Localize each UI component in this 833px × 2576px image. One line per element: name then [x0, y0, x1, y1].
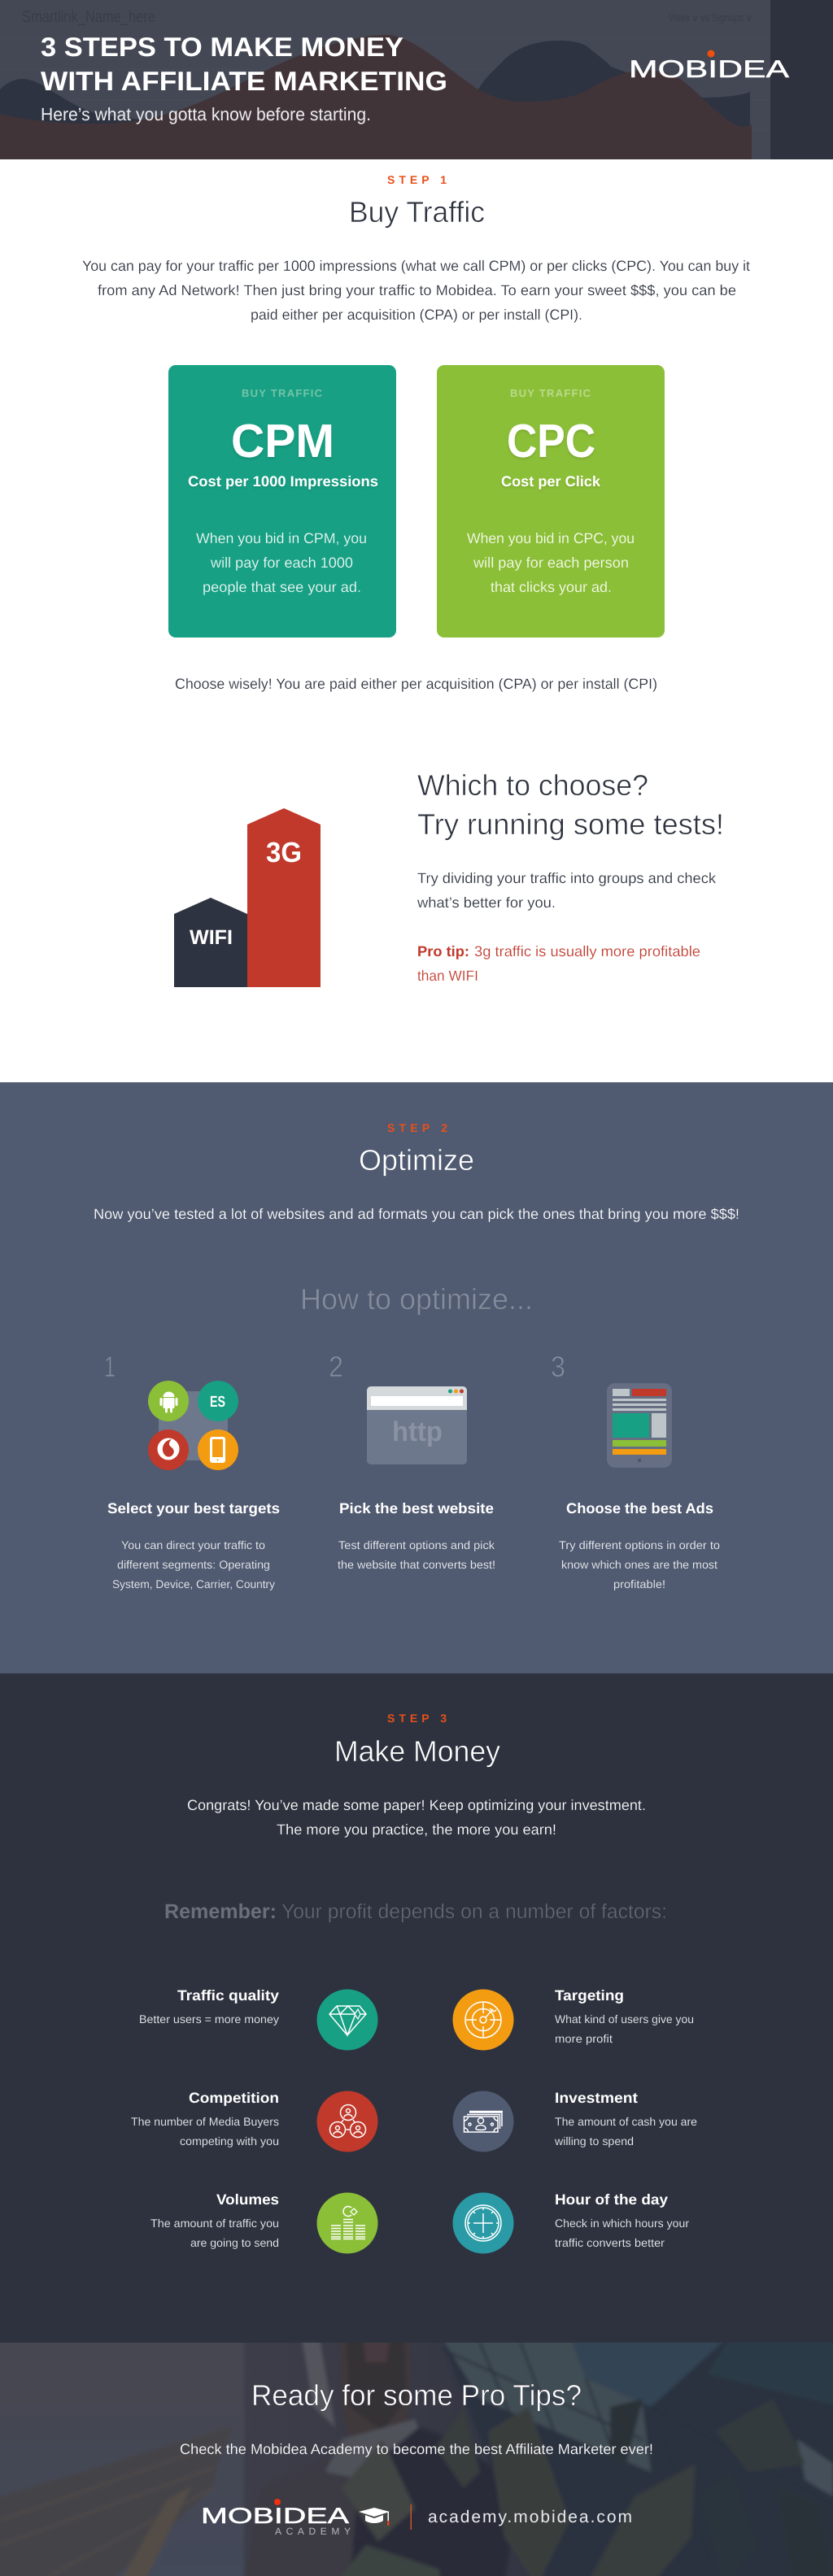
- number 3: 3: [551, 1350, 565, 1383]
- icon: target circles: [148, 1381, 238, 1470]
- background: businessman and falling money photo: [0, 2334, 833, 2576]
- text: ads: know which ones are the most: [561, 1558, 717, 1571]
- text: ads: [559, 1538, 720, 1590]
- pro tip: [417, 943, 700, 984]
- heading: optimize: Optimize: [359, 1143, 474, 1177]
- factor: competition: [131, 2090, 377, 2152]
- icon: tablet with ads: [607, 1383, 672, 1468]
- card: CPC: BUY TRAFFIC: [510, 387, 591, 399]
- heading: select targets: Select your best targets: [107, 1500, 280, 1516]
- intro text: The more you practice, the more you earn!: [277, 1821, 556, 1838]
- factor: investment: Investment: [555, 2090, 638, 2106]
- icon: people network: [317, 2091, 377, 2152]
- chart label: visits vs signups: Visits ∨ vs Signups ∨: [669, 11, 752, 24]
- subheading: remember: Your profit depends on a number of factors:: [281, 1900, 667, 1923]
- step 1 label: STEP 1: [387, 173, 447, 186]
- bar: wifi: [174, 898, 247, 987]
- panel: step 2 optimize: [0, 1082, 833, 1673]
- text: targets: different segments: Operating: [117, 1558, 270, 1571]
- factor: targeting: Targeting: [555, 1987, 624, 2004]
- card: CPC: CPC: [507, 415, 595, 468]
- text: try dividing: what’s better for you.: [416, 894, 556, 911]
- intro text: from any Ad Network! Then just bring your traffic to Mobidea. To earn your sweet $$$, you can be: [98, 282, 736, 298]
- panel: step 1 buy traffic: [0, 159, 833, 1082]
- divider line: [410, 2504, 412, 2530]
- factor: traffic quality: Better users = more money: [139, 2012, 279, 2026]
- heading: make money: Make Money: [334, 1734, 500, 1768]
- text: try dividing: Try dividing your traffic into groups and check: [417, 870, 717, 886]
- logo: Mobidea: MOBIDEA: [629, 56, 789, 83]
- factor: targeting: [452, 1987, 694, 2051]
- icon: browser window: [367, 1386, 467, 1464]
- chart label: smartlink name: Smartlink_Name_here: [22, 8, 155, 26]
- icon: banknotes: [452, 2091, 514, 2152]
- card: CPM: people that see your ad.: [203, 579, 361, 595]
- intro text: paid either per acquisition (CPA) or per install (CPI).: [251, 307, 582, 323]
- factor: volumes: are going to send: [190, 2236, 279, 2249]
- icon: coin stacks: [317, 2192, 377, 2254]
- logo: Mobidea Academy: [201, 2499, 390, 2537]
- card: CPC: Cost per Click: [501, 473, 601, 490]
- title: WITH AFFILIATE MARKETING: [41, 66, 447, 96]
- column 3: ads: [551, 1350, 720, 1590]
- text: targets: [112, 1538, 275, 1590]
- bar: wifi: WIFI: [190, 926, 233, 949]
- icon: target: [452, 1989, 514, 2051]
- factor: hour of the day: Check in which hours your: [555, 2217, 689, 2230]
- intro text: You can pay for your traffic per 1000 impressions (what we call CPM) or per clicks (CPC). You can buy it: [82, 258, 750, 274]
- text: website: the website that converts best!: [338, 1558, 495, 1571]
- factor: investment: [452, 2090, 697, 2152]
- card: CPC: that clicks your ad.: [491, 579, 612, 595]
- card: CPM: [168, 365, 396, 637]
- icon: browser window: http: [392, 1416, 443, 1447]
- link: academy url: academy.mobidea.com: [428, 2508, 632, 2526]
- step 3 label: STEP 3: [387, 1712, 447, 1725]
- heading: pick website: Pick the best website: [339, 1500, 494, 1516]
- panel: header: [0, 0, 833, 159]
- factor: investment: willing to spend: [554, 2134, 634, 2147]
- logo: Mobidea: [629, 50, 789, 83]
- number 1: 1: [104, 1350, 116, 1383]
- card: CPM: CPM: [231, 415, 334, 468]
- icon: diamond: [317, 1989, 377, 2051]
- chart: background hills: [0, 35, 752, 159]
- card: CPM: will pay for each 1000: [210, 555, 353, 571]
- logo: Mobidea Academy: MOBIDEA: [201, 2504, 349, 2528]
- bar: 3g: [247, 808, 321, 987]
- factor: investment: The amount of cash you are: [555, 2115, 697, 2128]
- text: targets: You can direct your traffic to: [121, 1538, 265, 1551]
- factor: targeting: What kind of users give you: [555, 2012, 694, 2026]
- subheading: how to optimize: How to optimize...: [300, 1282, 533, 1316]
- heading: choose ads: Choose the best Ads: [566, 1500, 713, 1516]
- column 2: website: [329, 1350, 495, 1571]
- card: CPC: [437, 365, 665, 637]
- subheading: remember: Remember:: [164, 1900, 277, 1923]
- factor: competition: competing with you: [180, 2134, 279, 2147]
- card: CPM: Cost per 1000 Impressions: [188, 473, 378, 490]
- column 1: targets: [104, 1350, 280, 1590]
- number 2: 2: [329, 1350, 343, 1383]
- card: CPM: When you bid in CPM, you: [196, 530, 367, 546]
- text: check the academy: Check the Mobidea Academy to become the best Affiliate Marketer ever!: [180, 2441, 653, 2457]
- heading: which to choose: Try running some tests!: [417, 807, 724, 841]
- heading: which to choose: Which to choose?: [417, 768, 648, 802]
- logo: Mobidea Academy: ACADEMY: [275, 2526, 351, 2537]
- pro tip: than WIFI: [417, 968, 478, 984]
- factor: hour of the day: Hour of the day: [555, 2191, 668, 2208]
- factor: hour of the day: [452, 2191, 689, 2254]
- icon: target circles: ES: [210, 1394, 225, 1411]
- card: CPC: When you bid in CPC, you: [467, 530, 635, 546]
- factor: volumes: Volumes: [216, 2191, 279, 2208]
- factor: targeting: more profit: [555, 2032, 613, 2045]
- intro text: [82, 258, 750, 323]
- heading: which to choose: [417, 768, 724, 841]
- factor: competition: The number of Media Buyers: [131, 2115, 279, 2128]
- bar: 3g: 3G: [266, 837, 302, 868]
- title: 3 STEPS TO MAKE MONEY: [41, 32, 403, 62]
- note: choose wisely: Choose wisely! You are paid either per acquisition (CPA) or per install (CPI): [175, 676, 657, 692]
- factor: hour of the day: traffic converts better: [555, 2236, 665, 2249]
- intro text: Now you’ve tested a lot of websites and ad formats you can pick the ones that bring you more $$$!: [94, 1206, 739, 1222]
- card: CPC: will pay for each person: [473, 555, 629, 571]
- text: ads: Try different options in order to: [559, 1538, 720, 1551]
- intro text: Congrats! You’ve made some paper! Keep optimizing your investment.: [187, 1797, 646, 1813]
- heading: buy traffic: Buy Traffic: [349, 195, 485, 228]
- factor: traffic quality: [139, 1987, 377, 2051]
- subtitle: Here’s what you gotta know before starting.: [41, 104, 371, 124]
- pro tip: Pro tip:: [417, 943, 469, 959]
- text: website: [338, 1538, 495, 1571]
- factor: traffic quality: Traffic quality: [177, 1987, 279, 2004]
- panel: footer call to action: [0, 2334, 833, 2576]
- text: try dividing: [416, 870, 717, 911]
- icon: clock: [452, 2192, 514, 2254]
- intro text: [187, 1797, 646, 1838]
- text: website: Test different options and pick: [338, 1538, 495, 1551]
- card: CPM: BUY TRAFFIC: [242, 387, 323, 399]
- factor: volumes: [150, 2191, 377, 2254]
- pro tip: 3g traffic is usually more profitable: [474, 943, 700, 959]
- text: targets: System, Device, Carrier, Country: [112, 1577, 275, 1590]
- factor: competition: Competition: [189, 2090, 279, 2106]
- heading: ready for pro tips: Ready for some Pro Tips?: [251, 2378, 582, 2412]
- bar chart: wifi vs 3g: [174, 808, 321, 987]
- panel: step 3 make money: [0, 1673, 833, 2343]
- title: [41, 32, 447, 96]
- factor: volumes: The amount of traffic you: [150, 2217, 279, 2230]
- step 2 label: STEP 2: [387, 1121, 447, 1134]
- text: ads: profitable!: [613, 1577, 665, 1590]
